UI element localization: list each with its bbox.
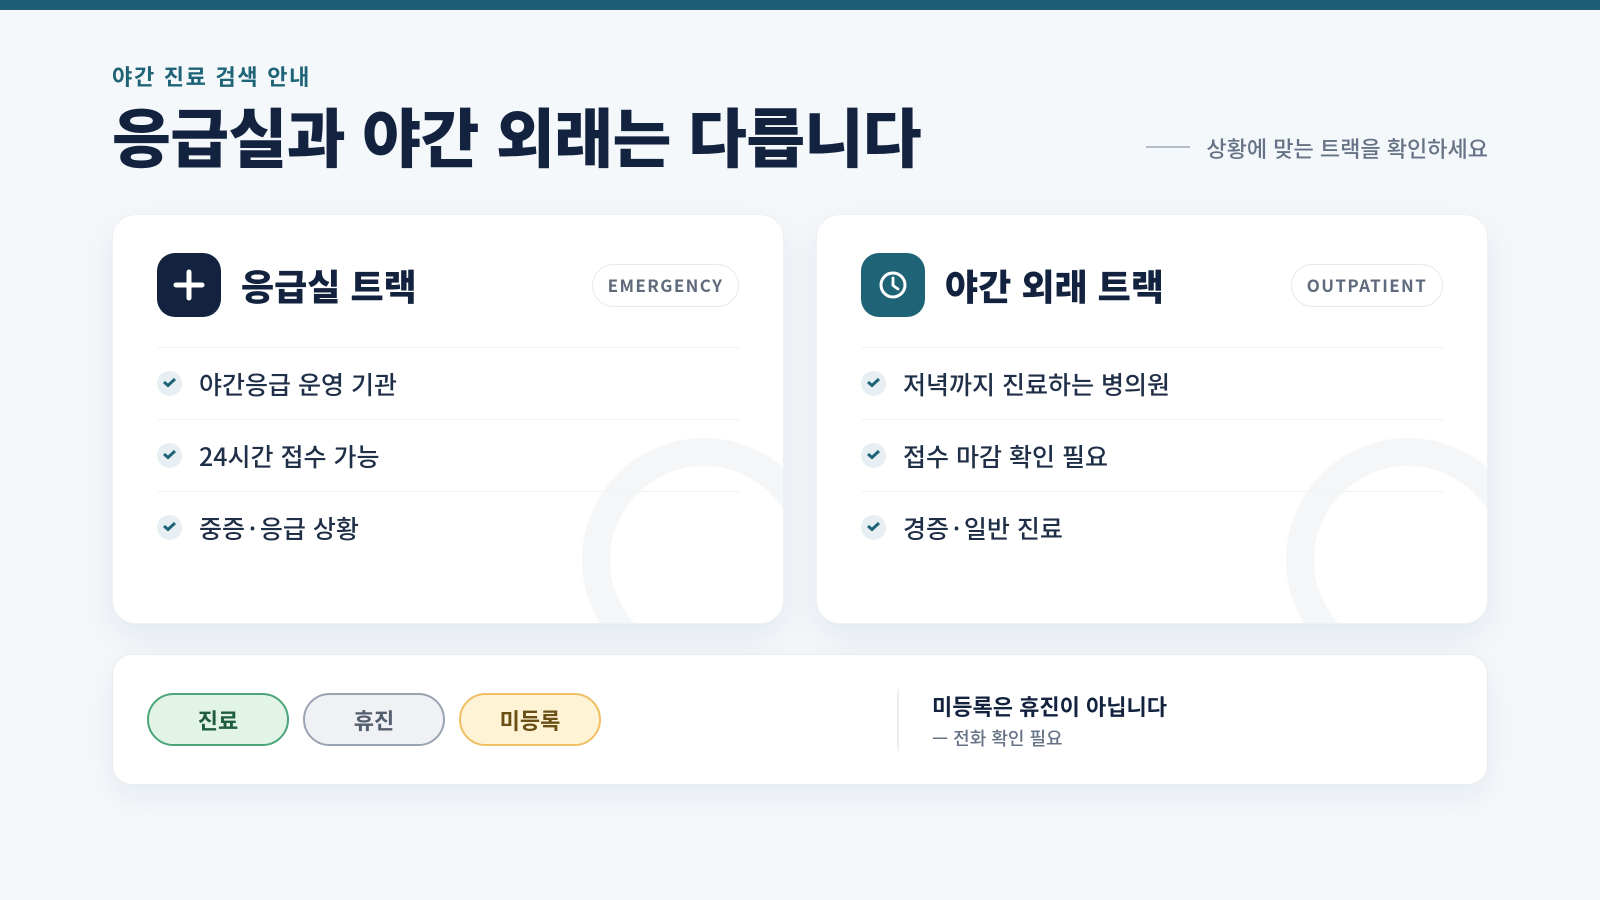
list item: mild and general care: 경증·일반 진료 bbox=[903, 510, 1063, 546]
callout heading: 미등록은 휴진이 아닙니다 bbox=[932, 690, 1167, 722]
status pill: closed bbox=[303, 693, 445, 746]
status pill: closed: 휴진 bbox=[354, 704, 394, 736]
panel heading: outpatient: 야간 외래 트랙 bbox=[945, 259, 1164, 311]
badge: outpatient: OUTPATIENT bbox=[1307, 272, 1427, 297]
list item: check reception closing: 접수 마감 확인 필요 bbox=[903, 438, 1108, 474]
subtitle with rule: 상황에 맞는 트랙을 확인하세요 bbox=[1206, 132, 1488, 164]
panel: night outpatient track bbox=[816, 214, 1488, 624]
callout note: — 전화 확인 필요 bbox=[932, 725, 1063, 751]
callout: unregistered is not closed bbox=[897, 689, 1219, 751]
list item: night emergency institutions: 야간응급 운영 기관 bbox=[199, 366, 397, 402]
list item: clinics open until evening: 저녁까지 진료하는 병의원 bbox=[903, 366, 1170, 402]
panel: emergency track bbox=[112, 214, 784, 624]
title: 응급실과 야간 외래는 다릅니다 bbox=[112, 89, 921, 181]
icon: clock bbox=[861, 253, 925, 317]
badge: emergency bbox=[592, 264, 739, 307]
status pill: open: 진료 bbox=[198, 704, 238, 736]
panel: status legend bar bbox=[112, 654, 1488, 785]
list item: severe and emergency: 중증·응급 상황 bbox=[199, 510, 359, 546]
top accent bar bbox=[0, 0, 1600, 10]
status pill: unregistered: 미등록 bbox=[500, 704, 560, 736]
badge: outpatient bbox=[1291, 264, 1443, 307]
panel heading: emergency: 응급실 트랙 bbox=[241, 259, 417, 311]
icon: medical plus bbox=[157, 253, 221, 317]
list item: 24 hour reception: 24시간 접수 가능 bbox=[199, 438, 380, 474]
badge: emergency: EMERGENCY bbox=[608, 272, 723, 297]
status pill: unregistered bbox=[459, 693, 601, 746]
status pill: open bbox=[147, 693, 289, 746]
eyebrow: 야간 진료 검색 안내 bbox=[112, 60, 311, 92]
